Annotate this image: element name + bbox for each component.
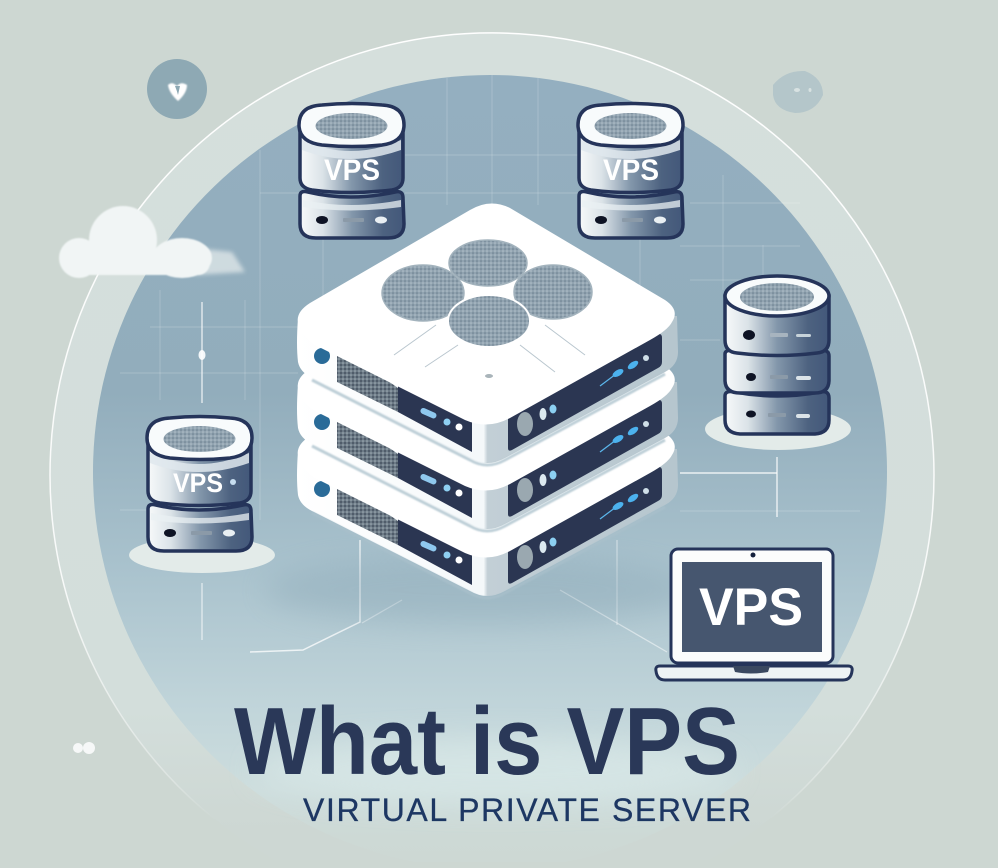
title: What is VPS (234, 688, 740, 795)
server stack right (705, 276, 851, 450)
label: VPS (173, 468, 223, 498)
mini server top right (578, 104, 683, 238)
icon: cloud (59, 206, 245, 278)
connector lines (198, 302, 777, 652)
label: VPS (324, 154, 380, 187)
laptop (656, 549, 852, 680)
icon: shield badge (147, 59, 207, 119)
small dots (73, 742, 95, 754)
mini server top left (299, 104, 404, 238)
stack shadow (265, 556, 695, 624)
server layer 3 (297, 336, 678, 598)
central server stack (297, 203, 678, 598)
server layer 2 (297, 269, 678, 531)
label: VPS (603, 154, 659, 187)
icon: faint status badge (773, 71, 823, 113)
subtitle: VIRTUAL PRIVATE SERVER (303, 792, 751, 828)
fan vents (382, 240, 592, 378)
server layer 1 (297, 203, 678, 465)
inner circle (93, 75, 887, 862)
mini server left (129, 416, 275, 573)
laptop label: VPS (699, 578, 803, 637)
